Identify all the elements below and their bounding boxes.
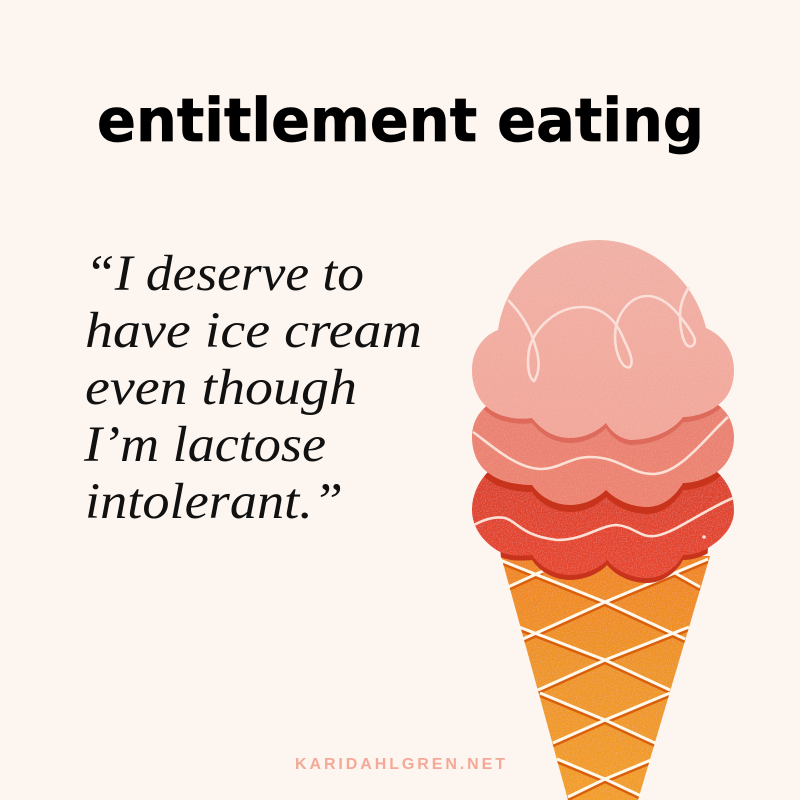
top scoop — [472, 240, 734, 445]
poster: entitlement eating — [84, 95, 734, 800]
quote text: have ice cream — [85, 303, 422, 359]
quote text: I’m lactose — [83, 417, 326, 473]
quote text — [83, 246, 422, 530]
icon: ice cream cone — [472, 240, 734, 800]
middle scoop — [472, 405, 734, 514]
quote text: even though — [85, 360, 357, 416]
quote text: intolerant.” — [85, 474, 343, 530]
quote text: “I deserve to — [85, 246, 364, 302]
bottom scoop — [472, 472, 734, 583]
footer: website: KARIDAHLGREN.NET — [295, 756, 505, 773]
title: entitlement eating — [97, 86, 704, 156]
waffle cone — [500, 556, 710, 800]
